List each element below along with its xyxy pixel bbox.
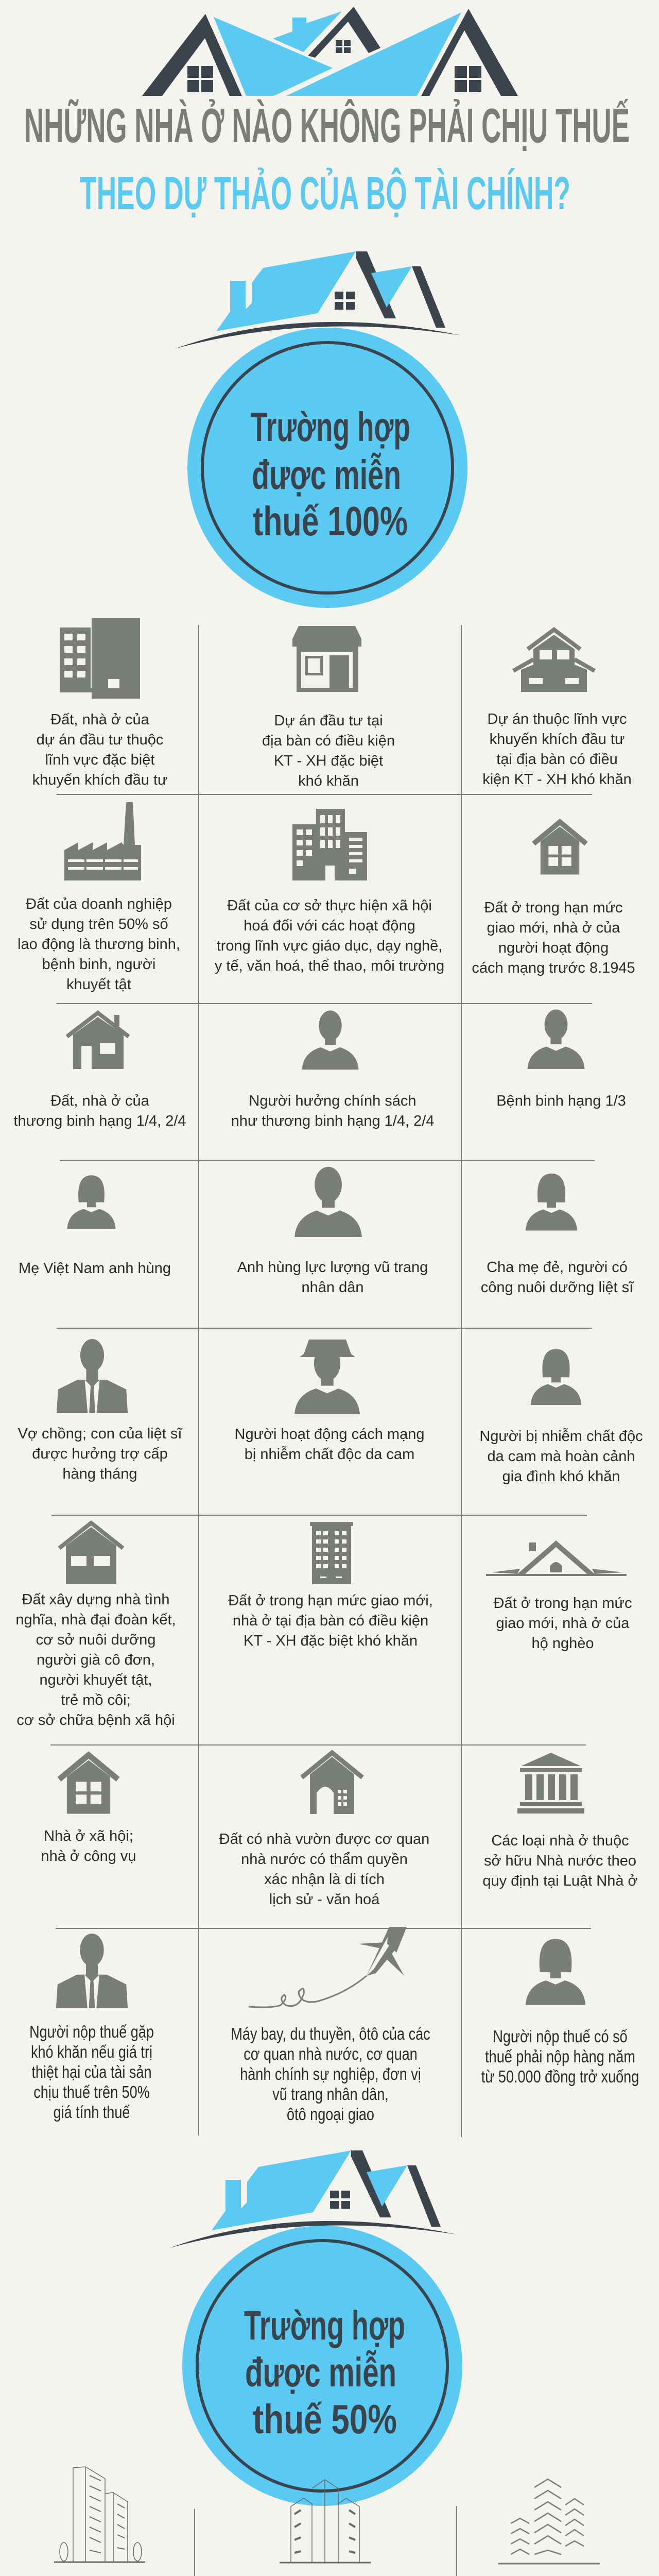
icon: outline towers [280,2480,371,2563]
cell: di tích: Đất có nhà vườn được cơ quan [219,1831,429,1848]
cell: nhà ở xã hội [41,1755,136,1865]
icon: factory [64,802,141,880]
icon: woman [526,1174,577,1230]
cell: mẹ Việt Nam anh hùng [19,1175,171,1277]
cell: khuyến khích tại địa bàn khó khăn: khuyến khích đầu tư [490,731,625,748]
cell: dự án đặc biệt khuyến khích: dự án đầu tư thuộc [37,732,163,748]
cell: dưới 50.000 đồng [481,1939,639,2087]
cell: chất độc da cam [235,1340,424,1463]
cell: người hoạt động cách mạng trước 8.1945: giao mới, nhà ở của [487,920,620,936]
icon: outline towers with trees [54,2467,145,2562]
cell: người hoạt động cách mạng trước 8.1945 [472,822,635,976]
icon: airplane with trail [249,1927,407,2007]
circle badge: 50%: thuế 50% [253,2396,397,2442]
cell: địa bàn đặc biệt khó khăn: địa bàn có điều kiện [262,733,395,749]
cell: dưới 50.000 đồng: thuế phải nộp hàng năm [485,2048,635,2066]
cell: địa bàn đặc biệt khó khăn (đất ở): Đất ở trong hạn mức giao mới, [228,1592,433,1609]
cell: nhà tình nghĩa: cơ sở chữa bệnh xã hội [16,1712,175,1728]
cell 50%: dự án khuyến khích [22,2467,164,2576]
cell: như thương binh 1/4 2/4: Người hưởng chính sách [249,1093,417,1109]
cell: địa bàn đặc biệt khó khăn (đất ở) [228,1522,433,1649]
cell: da cam khó khăn: Người bị nhiễm chất độc [479,1428,643,1445]
cell: dự án đặc biệt khuyến khích [32,618,167,788]
cell: anh hùng lực lượng vũ trang [237,1167,428,1296]
circle badge: 100%: được miễn [252,452,401,498]
cell: thương binh 1/4 2/4: Đất, nhà ở của [50,1093,150,1109]
icon: striped towers [498,2479,600,2564]
roof above circle 50% [170,2150,457,2248]
cell: máy bay du thuyền ôtô: cơ quan nhà nước, cơ quan [244,2045,418,2064]
cell: dự án đặc biệt khuyến khích: khuyến khích đầu tư [32,772,167,788]
cell: da cam khó khăn [479,1349,643,1485]
cell: dự án đặc biệt khuyến khích: Đất, nhà ở của [50,711,150,728]
cell: địa bàn đặc biệt khó khăn: Dự án đầu tư tại [274,713,383,729]
icon: city buildings [292,809,367,880]
cell: người nộp thuế gặp khó khăn trên 50%: khó khăn nếu giá trị [31,2043,152,2062]
cell: sở hữu Nhà nước: sở hữu Nhà nước theo [484,1853,636,1869]
icon: woman [67,1175,116,1229]
cell: chất độc da cam: bị nhiễm chất độc da cam [245,1446,414,1463]
cell: địa bàn đặc biệt khó khăn: khó khăn [298,773,359,789]
cell: người hoạt động cách mạng trước 8.1945: Đất ở trong hạn mức [484,900,622,916]
cell: hộ nghèo: Đất ở trong hạn mức [494,1595,632,1612]
grid 50%: lines [53,2506,597,2576]
cell: doanh nghiệp trên 50%: sử dụng trên 50% số [29,916,168,933]
cell: xã hội hoá [215,809,444,974]
circle badge: 50% [182,2226,462,2506]
cell: địa bàn đặc biệt khó khăn [262,626,395,789]
cell: nhà tình nghĩa [15,1523,176,1728]
cell: di tích: xác nhận là di tích [264,1871,385,1888]
icon: man in suit [57,1339,128,1413]
cell: thương binh 1/4 2/4 [13,1013,186,1129]
cell: người hoạt động cách mạng trước 8.1945: cách mạng trước 8.1945 [472,960,635,976]
cell: cha mẹ đẻ liệt sĩ: Cha mẹ đẻ, người có [487,1259,628,1276]
cell: nhà tình nghĩa: trẻ mồ côi; [61,1692,131,1708]
cell: khuyến khích tại địa bàn khó khăn: kiện KT - XH khó khăn [482,771,632,788]
icon: tall building [310,1522,353,1584]
icon: man [528,1009,584,1069]
icon: small house [67,1013,129,1069]
grid 100%: lines [50,625,595,2137]
cell: anh hùng lực lượng vũ trang: Anh hùng lực lượng vũ trang [237,1259,428,1276]
cell: chất độc da cam: Người hoạt động cách mạng [235,1426,424,1443]
cell: da cam khó khăn: da cam mà hoàn cảnh [488,1448,635,1465]
cell: doanh nghiệp trên 50%: Đất của doanh nghiệp [26,896,172,912]
cell: nhà tình nghĩa: người già cô đơn, [37,1652,155,1668]
cell: người nộp thuế gặp khó khăn trên 50%: Người nộp thuế gặp [29,2023,154,2042]
cell: mẹ Việt Nam anh hùng: Mẹ Việt Nam anh hùng [19,1260,171,1277]
cell: thương binh 1/4 2/4: thương binh hạng 1/4, 2/4 [13,1113,186,1129]
cell: máy bay du thuyền ôtô: Máy bay, du thuyền, ôtô của các [231,2025,430,2044]
circle badge: 100%: thuế 100% [253,498,408,544]
cell: bệnh binh 1/3: Bệnh binh hạng 1/3 [496,1093,626,1109]
cell: người nộp thuế gặp khó khăn trên 50% [29,1934,154,2122]
icon: large house [513,630,595,692]
cell: người nộp thuế gặp khó khăn trên 50%: giá tính thuế [54,2104,130,2122]
cell: máy bay du thuyền ôtô: ôtô ngoại giao [287,2106,374,2124]
cell: như thương binh 1/4 2/4 [231,1010,434,1129]
cell: nhà tình nghĩa: cơ sở nuôi dưỡng [36,1632,155,1648]
cell: doanh nghiệp trên 50%: lao động là thương binh, [18,936,180,953]
cell: hộ nghèo: hộ nghèo [532,1635,594,1652]
circle badge: 50%: Trường hợp [244,2302,405,2348]
icon: man [294,1167,362,1237]
cell: dự án đặc biệt khuyến khích: lĩnh vực đặc biệt [45,752,154,768]
cell: người hoạt động cách mạng trước 8.1945: người hoạt động [498,940,609,956]
cell: cha mẹ đẻ liệt sĩ: công nuôi dưỡng liệt sĩ [481,1279,634,1296]
cell: anh hùng lực lượng vũ trang: nhân dân [302,1279,363,1296]
cell: doanh nghiệp trên 50%: khuyết tật [66,976,131,993]
cell: dưới 50.000 đồng: từ 50.000 đồng trở xuống [481,2068,639,2087]
cell: sở hữu Nhà nước: quy định tại Luật Nhà ở [482,1873,638,1889]
cell: di tích: nhà nước có thẩm quyền [241,1851,408,1868]
cell: xã hội hoá: hoá đối với các hoạt động [244,918,415,934]
cell: hộ nghèo [486,1540,632,1652]
cell: khuyến khích tại địa bàn khó khăn: Dự án thuộc lĩnh vực [488,711,627,727]
icon: man in suit [56,1934,128,2008]
cell: người nộp thuế gặp khó khăn trên 50%: chịu thuế trên 50% [33,2083,150,2102]
cell: di tích: lịch sử - văn hoá [269,1891,380,1908]
cell: vợ chồng con liệt sĩ [18,1339,183,1482]
icon: house [533,822,586,875]
cell: nhà tình nghĩa: nghĩa, nhà đại đoàn kết, [15,1612,176,1628]
icon: woman [526,1939,585,2005]
cell: nhà ở xã hội: Nhà ở xã hội; [44,1828,133,1844]
cell: vợ chồng con liệt sĩ: hàng tháng [62,1466,137,1482]
cell 50%: doanh nghiệp 20-50% [467,2479,649,2576]
cell: như thương binh 1/4 2/4: như thương binh hạng 1/4, 2/4 [231,1113,434,1129]
cell: sở hữu Nhà nước [482,1753,638,1889]
header roofs illustration [142,7,518,96]
cell: vợ chồng con liệt sĩ: được hưởng trợ cấp [32,1446,168,1462]
circle badge: 50%: được miễn [245,2349,396,2395]
cell: bệnh binh 1/3 [496,1009,626,1109]
roof above circle 100% [175,251,461,349]
cell: khuyến khích tại địa bàn khó khăn: tại địa bàn có điều [496,751,618,768]
icon: house [59,1523,123,1584]
cell: vợ chồng con liệt sĩ: Vợ chồng; con của liệt sĩ [18,1426,183,1442]
icon: government building [517,1753,584,1814]
cell: xã hội hoá: y tế, văn hoá, thể thao, môi trường [215,958,444,974]
icon: house with arch door [302,1753,362,1814]
cell: địa bàn đặc biệt khó khăn (đất ở): nhà ở tại địa bàn có điều kiện [233,1613,428,1629]
icon: woman [531,1349,581,1405]
circle badge: 100% [187,328,467,608]
cell: xã hội hoá: Đất của cơ sở thực hiện xã hội [227,897,432,914]
cell: xã hội hoá: trong lĩnh vực giáo dục, dạy nghề, [217,938,442,954]
icon: man with hat [294,1340,360,1414]
icon: house [59,1755,118,1814]
cell: nhà tình nghĩa: người khuyết tật, [39,1672,152,1688]
cell: địa bàn đặc biệt khó khăn (đất ở): KT - XH đặc biệt khó khăn [244,1633,418,1649]
cell 50%: địa bàn khó khăn [232,2480,413,2576]
title [24,98,630,219]
cell: sở hữu Nhà nước: Các loại nhà ở thuộc [491,1833,629,1849]
cell: doanh nghiệp trên 50% [18,802,180,993]
cell: máy bay du thuyền ôtô: hành chính sự nghiệp, đơn vị [240,2065,421,2084]
icon: shop [292,626,361,692]
cell: máy bay du thuyền ôtô [231,1927,430,2124]
cell: doanh nghiệp trên 50%: bệnh binh, người [42,956,155,973]
cell: di tích [219,1753,429,1908]
cell: da cam khó khăn: gia đình khó khăn [502,1468,620,1485]
cell: dưới 50.000 đồng: Người nộp thuế có số [493,2028,628,2046]
cell: nhà ở xã hội: nhà ở công vụ [41,1848,136,1865]
cell: địa bàn đặc biệt khó khăn: KT - XH đặc biệt [274,753,383,769]
cell: máy bay du thuyền ôtô: vũ trang nhân dân, [272,2086,389,2104]
cell: hộ nghèo: giao mới, nhà ở của [496,1615,630,1632]
cell: người nộp thuế gặp khó khăn trên 50%: thiệt hại của tài sản [31,2063,152,2082]
circle badge: 100%: Trường hợp [251,404,410,450]
cell: cha mẹ đẻ liệt sĩ [481,1174,634,1296]
icon: man [302,1010,358,1070]
icon: roof house [486,1540,627,1576]
cell: nhà tình nghĩa: Đất xây dựng nhà tình [22,1591,170,1608]
cell: khuyến khích tại địa bàn khó khăn [482,630,632,788]
icon: office building [60,618,140,699]
